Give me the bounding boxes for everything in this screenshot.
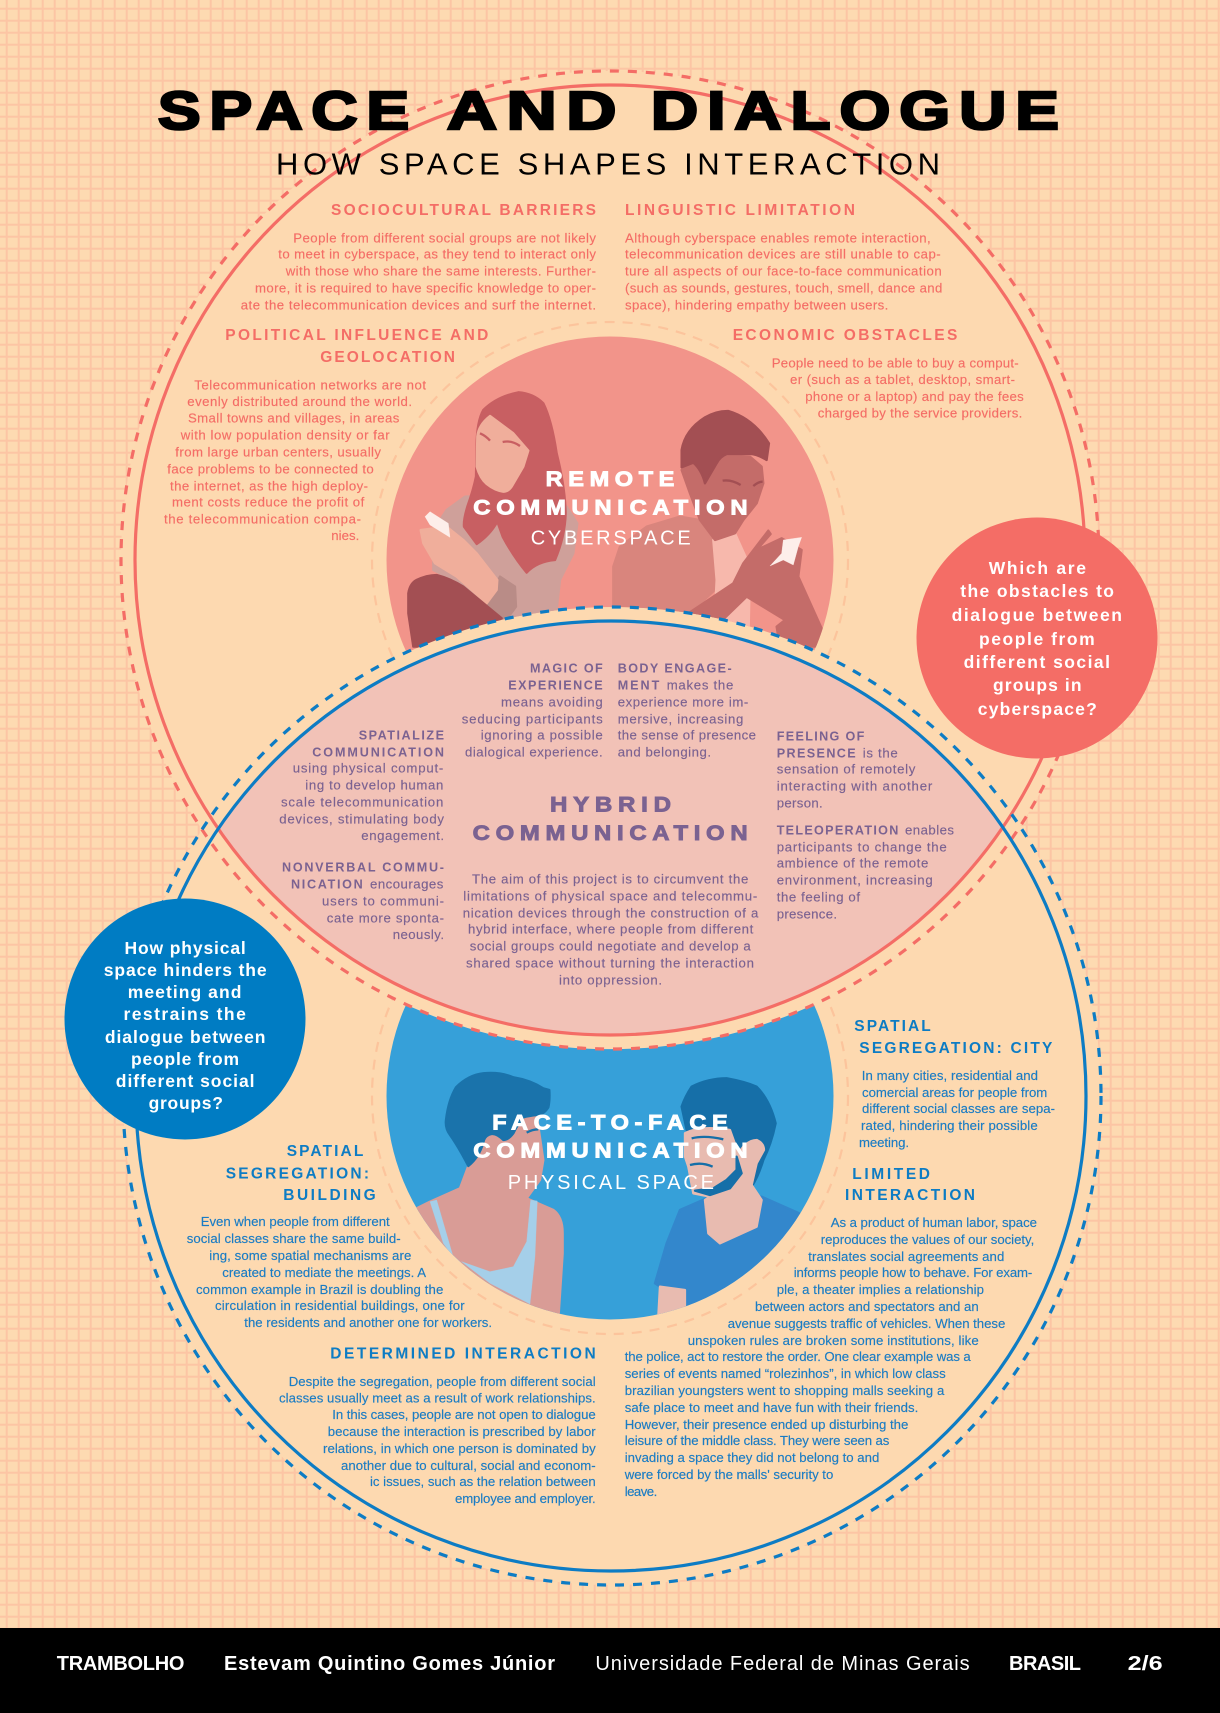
text block: (such as sounds, gestures, touch, smell, dance and xyxy=(625,281,942,296)
callout: physical space question: How physical xyxy=(124,938,246,958)
text block: ate the telecommunication devices and surf the internet. xyxy=(241,297,596,312)
project aim: The aim of this project is to circumvent the xyxy=(472,871,748,886)
text block: comercial areas for people from xyxy=(862,1085,1047,1100)
title: DIALOGUE xyxy=(651,81,1068,141)
heading: SOCIOCULTURAL BARRIERS xyxy=(331,202,596,219)
spatialize communication: SPATIALIZE xyxy=(359,728,444,742)
text block: safe place to meet and have fun with their friends. xyxy=(625,1400,918,1415)
man shirt xyxy=(655,1197,799,1308)
illustration: remote communication circle xyxy=(386,336,834,651)
text block: Although cyberspace enables remote interaction, xyxy=(625,230,931,245)
callout: cyberspace question: dialogue between xyxy=(952,605,1122,625)
text block: classes usually meet as a result of work relationships. xyxy=(279,1390,596,1405)
footer: Estevam Quintino Gomes Júnior xyxy=(224,1653,555,1675)
nonverbal communication xyxy=(282,860,444,942)
magic of experience: MAGIC OF xyxy=(530,661,603,675)
spatialize communication: engagement. xyxy=(361,828,444,843)
text block: charged by the service providers. xyxy=(818,406,1022,421)
callout: cyberspace question: the obstacles to xyxy=(960,581,1114,601)
callout: cyberspace question: different social xyxy=(964,652,1110,672)
text block: rated, hindering their possible xyxy=(861,1118,1038,1133)
teleoperation: environment, increasing xyxy=(777,872,933,887)
text block: er (such as a tablet, desktop, smart- xyxy=(790,372,1015,387)
text block: meeting. xyxy=(859,1135,909,1150)
text block xyxy=(241,230,596,312)
body engagement: BODY ENGAGE- xyxy=(618,661,732,675)
panel: limited interaction xyxy=(624,1166,1037,1499)
text block: between actors and spectators and an xyxy=(755,1299,979,1314)
body engagement: the sense of presence xyxy=(618,727,756,742)
teleoperation: participants to change the xyxy=(777,839,947,854)
heading xyxy=(226,1143,376,1204)
teleoperation: the feeling of xyxy=(777,889,860,904)
text block xyxy=(625,230,942,312)
label: remote communication: REMOTE xyxy=(546,468,680,491)
teleoperation: enables xyxy=(905,822,954,837)
text block: space), hindering empathy between users. xyxy=(625,297,888,312)
heading: LIMITED xyxy=(852,1166,930,1183)
text block: employee and employer. xyxy=(455,1491,596,1506)
text block: Small towns and villages, in areas xyxy=(188,410,400,425)
man phone xyxy=(770,537,802,566)
spatialize communication: devices, stimulating body xyxy=(279,811,444,826)
label: remote communication: CYBERSPACE xyxy=(531,528,691,550)
heading: GEOLOCATION xyxy=(320,349,455,366)
callout: cyberspace question: people from xyxy=(979,629,1095,649)
panel: determined interaction xyxy=(279,1346,596,1506)
illustration: face-to-face circle xyxy=(386,1004,834,1320)
text block: created to mediate the meetings. A xyxy=(222,1265,426,1280)
text block: with low population density or far xyxy=(180,427,390,442)
heading: BUILDING xyxy=(283,1187,376,1204)
text block: another due to cultural, social and econom- xyxy=(341,1458,596,1473)
heading: LINGUISTIC LIMITATION xyxy=(625,202,855,219)
text block: different social classes are sepa- xyxy=(862,1101,1055,1116)
nonverbal communication: NONVERBAL COMMU- xyxy=(282,860,444,874)
panel: hybrid communication xyxy=(279,661,954,987)
text block: the police, act to restore the order. One clear example was a xyxy=(625,1349,971,1364)
teleoperation: presence. xyxy=(777,906,837,921)
footer: 2/6 xyxy=(1128,1653,1163,1675)
text block xyxy=(279,1374,596,1506)
man hair xyxy=(682,1078,776,1187)
text block: unspoken rules are broken some institutions, like xyxy=(688,1333,979,1348)
text block: Telecommunication networks are not xyxy=(194,377,426,392)
body engagement: experience more im- xyxy=(618,694,748,709)
heading: SEGREGATION: CITY xyxy=(859,1040,1053,1057)
callout: physical space question: groups? xyxy=(149,1093,223,1113)
text block: ing, some spatial mechanisms are xyxy=(209,1248,411,1263)
hybrid heading: HYBRID xyxy=(550,794,677,817)
text block: Even when people from different xyxy=(201,1214,390,1229)
man skin xyxy=(685,1128,764,1243)
text block: People need to be able to buy a comput- xyxy=(772,355,1019,370)
label: face-to-face communication: FACE-TO-FACE xyxy=(492,1111,733,1134)
text block: common example in Brazil is doubling the xyxy=(196,1282,443,1297)
footer: BRASIL xyxy=(1009,1653,1081,1675)
spatialize communication xyxy=(279,728,444,843)
feeling of presence: interacting with another xyxy=(777,778,933,793)
text block: more, it is required to have specific knowledge to oper- xyxy=(255,281,596,296)
text block: to meet in cyberspace, as they tend to interact only xyxy=(278,247,596,262)
feeling of presence: person. xyxy=(777,795,823,810)
text block: People from different social groups are not likely xyxy=(293,230,596,245)
text block: series of events named “rolezinhos”, in which low class xyxy=(625,1366,946,1381)
nonverbal communication: NICATION xyxy=(291,877,363,891)
callout: cyberspace question xyxy=(916,518,1158,758)
woman skin xyxy=(413,1115,563,1320)
heading: SPATIAL xyxy=(287,1143,363,1160)
project aim: into oppression. xyxy=(559,972,662,987)
project aim: nication devices through the construction of a xyxy=(463,905,759,920)
footer: TRAMBOLHO xyxy=(57,1653,184,1675)
spatialize communication: COMMUNICATION xyxy=(312,745,444,759)
text block: In many cities, residential and xyxy=(862,1068,1038,1083)
text block: the internet, as the high deploy- xyxy=(170,478,368,493)
heading: DETERMINED INTERACTION xyxy=(330,1346,596,1363)
project aim xyxy=(463,871,759,987)
heading: SPATIAL xyxy=(854,1018,931,1035)
heading: POLITICAL INFLUENCE AND xyxy=(225,327,488,344)
heading: SEGREGATION: xyxy=(226,1165,369,1182)
woman hair xyxy=(464,392,566,573)
man hair xyxy=(682,411,769,483)
man hands xyxy=(688,531,822,647)
teleoperation: ambience of the remote xyxy=(777,855,928,870)
text block: translates social agreements and xyxy=(808,1249,1004,1264)
man face xyxy=(682,455,763,540)
text block: the telecommunication compa- xyxy=(164,511,361,526)
nonverbal communication: users to communi- xyxy=(322,893,444,908)
callout: physical space question: meeting and xyxy=(128,982,241,1002)
text block: ple, a theater implies a relationship xyxy=(777,1282,984,1297)
text block xyxy=(164,377,426,543)
woman phone xyxy=(425,512,450,537)
callout: physical space question: dialogue between xyxy=(105,1027,266,1047)
text block: evenly distributed around the world. xyxy=(187,394,412,409)
feeling of presence: PRESENCE xyxy=(777,746,856,760)
heading xyxy=(854,1018,1053,1057)
callout: cyberspace question: groups in xyxy=(993,675,1082,695)
text block xyxy=(859,1068,1055,1150)
panel: sociocultural barriers xyxy=(241,202,596,312)
body engagement xyxy=(618,661,756,759)
text block: brazilian youngsters went to shopping malls seeking a xyxy=(625,1383,945,1398)
body engagement: makes the xyxy=(667,677,733,692)
callout: physical space question: people from xyxy=(131,1049,239,1069)
woman knee xyxy=(408,575,502,647)
label: face-to-face communication: PHYSICAL SPACE xyxy=(508,1172,714,1194)
spatialize communication: scale telecommunication xyxy=(281,794,443,809)
text block: circulation in residential buildings, one for xyxy=(215,1298,465,1313)
text block: nies. xyxy=(331,528,359,543)
text block: were forced by the malls' security to xyxy=(624,1467,833,1482)
teleoperation xyxy=(777,822,954,921)
nonverbal communication: neously. xyxy=(393,927,444,942)
magic of experience: dialogical experience. xyxy=(465,744,603,759)
text block: relations, in which one person is dominated by xyxy=(323,1441,596,1456)
text block: ture all aspects of our face-to-face communication xyxy=(625,264,942,279)
panel: political influence xyxy=(164,327,488,543)
woman face xyxy=(477,416,528,492)
text block: leave. xyxy=(625,1484,657,1499)
text block: social classes share the same build- xyxy=(187,1231,401,1246)
text block: telecommunication devices are still unable to cap- xyxy=(625,247,941,262)
text block: with those who share the same interests. Further- xyxy=(285,264,596,279)
panel: spatial segregation city xyxy=(854,1018,1055,1150)
woman hair xyxy=(446,1073,550,1166)
callout: physical space question: restrains the xyxy=(124,1004,246,1024)
title: AND xyxy=(447,81,626,141)
feeling of presence: FEELING OF xyxy=(777,729,865,743)
dashed ring: face-to-face xyxy=(371,1000,849,1335)
nonverbal communication: encourages xyxy=(370,876,444,891)
text block: In this cases, people are not open to dialogue xyxy=(332,1407,596,1422)
label: remote communication: COMMUNICATION xyxy=(473,496,753,519)
body engagement: mersive, increasing xyxy=(618,711,743,726)
spatialize communication: ing to develop human xyxy=(305,777,443,792)
text block: the residents and another one for workers. xyxy=(244,1315,492,1330)
text block: invading a space they did not belong to and xyxy=(625,1450,879,1465)
panel: spatial segregation building xyxy=(187,1143,492,1330)
heading: INTERACTION xyxy=(845,1187,975,1204)
label: face-to-face communication xyxy=(473,1111,753,1194)
title xyxy=(158,81,1068,141)
woman shirt xyxy=(433,493,577,623)
subtitle: HOW SPACE SHAPES INTERACTION xyxy=(276,146,940,182)
panel: linguistic limitation xyxy=(625,202,942,312)
hybrid heading: COMMUNICATION xyxy=(473,822,753,845)
text block: reproduces the values of our society, xyxy=(821,1232,1034,1247)
magic of experience: seducing participants xyxy=(462,711,603,726)
callout: cyberspace question: Which are xyxy=(989,558,1086,578)
venn rings xyxy=(121,71,1101,1585)
magic of experience xyxy=(462,661,603,759)
hybrid heading xyxy=(473,794,753,845)
label: remote communication xyxy=(473,468,753,550)
title: SPACE xyxy=(158,81,418,141)
text block xyxy=(187,1214,492,1330)
tank top xyxy=(430,1200,537,1304)
feeling of presence: is the xyxy=(863,745,898,760)
project aim: limitations of physical space and telecommu- xyxy=(463,888,757,903)
text block: ic issues, such as the relation between xyxy=(370,1474,596,1489)
hybrid lens fill xyxy=(220,622,1001,1034)
text block: ment costs reduce the profit of xyxy=(172,495,365,510)
text block: because the interaction is prescribed by labor xyxy=(328,1424,596,1439)
body engagement: and belonging. xyxy=(618,744,711,759)
footer: Universidade Federal de Minas Gerais xyxy=(595,1653,970,1675)
project aim: social groups could negotiate and develop a xyxy=(470,938,751,953)
callout: physical space question: different social xyxy=(116,1071,254,1091)
text block: Despite the segregation, people from different social xyxy=(289,1374,596,1389)
text block xyxy=(772,355,1024,421)
magic of experience: means avoiding xyxy=(501,694,603,709)
panel: economic obstacles xyxy=(733,327,1024,421)
text block: leisure of the middle class. They were seen as xyxy=(625,1433,890,1448)
text block: phone or a laptop) and pay the fees xyxy=(805,389,1024,404)
text block: avenue suggests traffic of vehicles. When these xyxy=(728,1316,1005,1331)
spatialize communication: using physical comput- xyxy=(293,760,443,775)
magic of experience: ignoring a possible xyxy=(481,727,603,742)
woman arm xyxy=(421,527,497,603)
heading xyxy=(845,1166,975,1204)
heading xyxy=(225,327,488,366)
project aim: shared space without turning the interaction xyxy=(466,955,754,970)
text block xyxy=(624,1215,1037,1499)
man shirt xyxy=(613,517,718,613)
callout: cyberspace question: cyberspace? xyxy=(978,699,1097,719)
label: face-to-face communication: COMMUNICATION xyxy=(473,1139,753,1162)
heading: ECONOMIC OBSTACLES xyxy=(733,327,957,344)
text block: As a product of human labor, space xyxy=(831,1215,1037,1230)
text block: face problems to be connected to xyxy=(167,461,374,476)
text block: from large urban centers, usually xyxy=(175,444,381,459)
magic of experience: EXPERIENCE xyxy=(508,678,603,692)
text block: However, their presence ended up disturbing the xyxy=(625,1417,908,1432)
dashed ring: remote xyxy=(371,321,849,657)
body engagement: MENT xyxy=(618,678,660,692)
teleoperation: TELEOPERATION xyxy=(777,823,898,837)
nonverbal communication: cate more sponta- xyxy=(327,910,444,925)
venn base: peach circles xyxy=(121,71,1101,1585)
text block: informs people how to behave. For exam- xyxy=(794,1265,1032,1280)
feeling of presence xyxy=(777,729,933,810)
callout: physical space question: space hinders the xyxy=(104,960,267,980)
footer xyxy=(0,1628,1220,1713)
project aim: hybrid interface, where people from different xyxy=(468,921,754,936)
callout: physical space question xyxy=(64,898,306,1140)
man beard xyxy=(695,1157,742,1195)
feeling of presence: sensation of remotely xyxy=(777,761,916,776)
